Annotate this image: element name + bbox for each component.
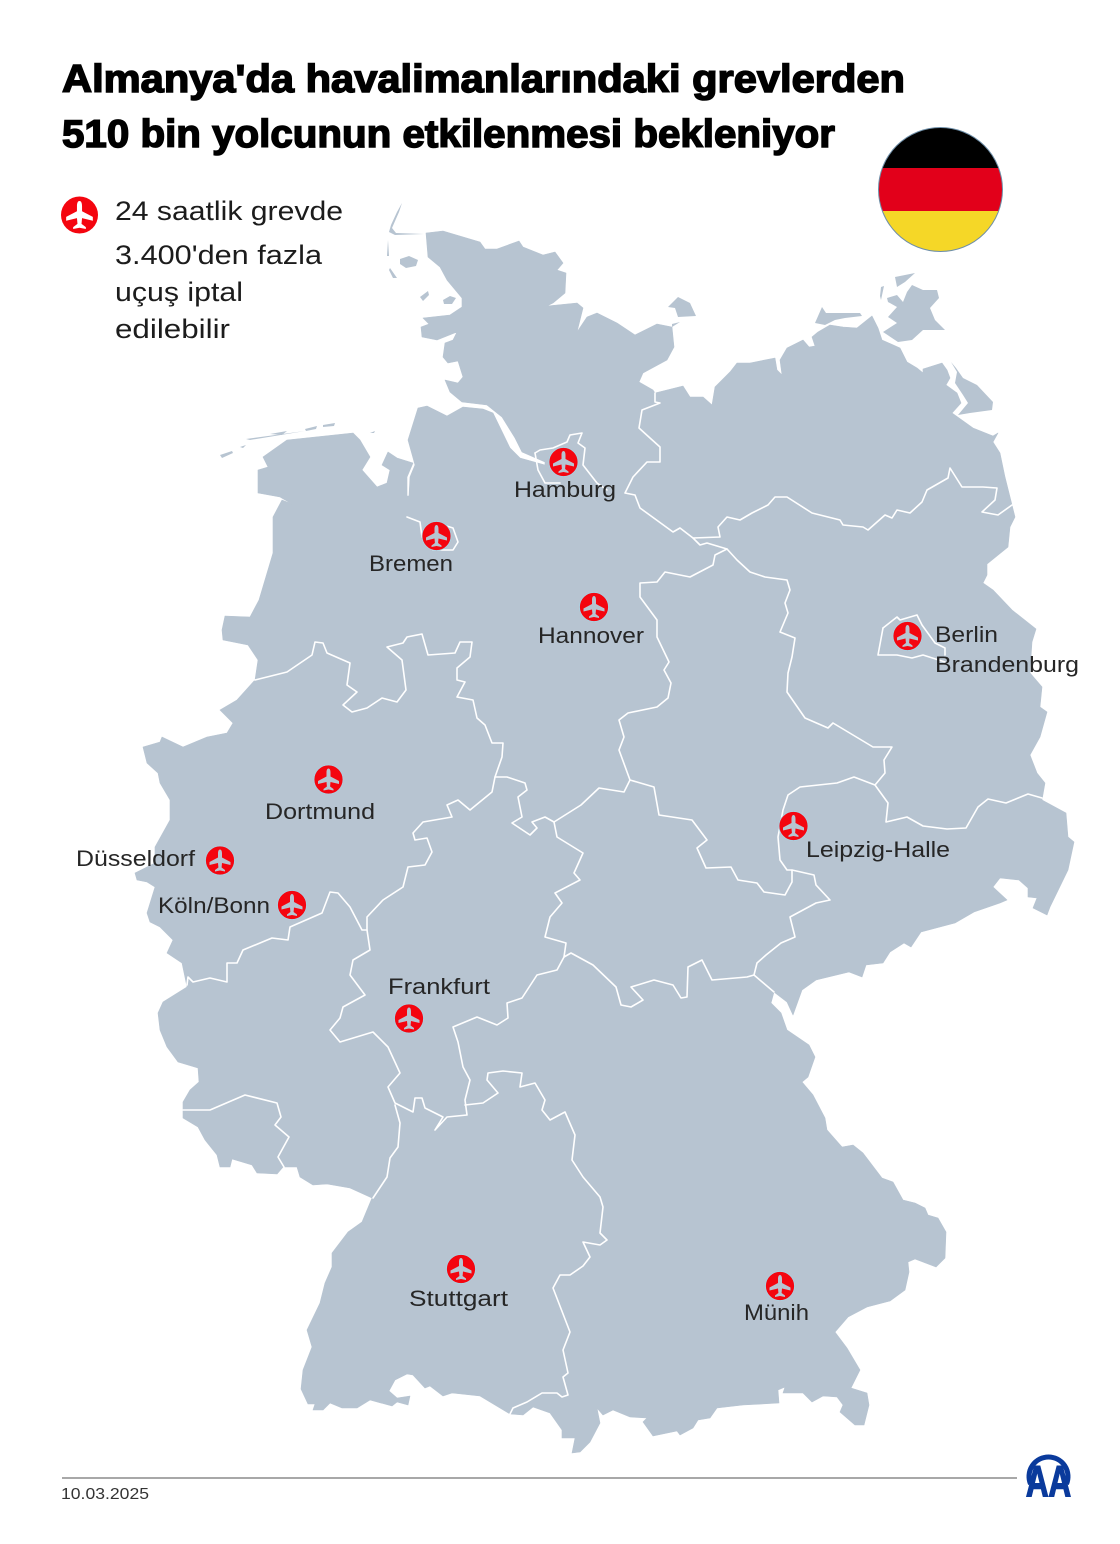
airport: Dortmund: Dortmund (265, 799, 375, 824)
date: 10.03.2025 (61, 1486, 149, 1503)
airport: Frankfurt: Frankfurt (388, 974, 490, 999)
airport: Hamburg: Hamburg (514, 477, 616, 502)
footer rule (62, 1477, 1017, 1479)
legend text: uçuş iptal (115, 277, 243, 307)
airport: Stuttgart: Stuttgart (409, 1286, 508, 1311)
airport: Stuttgart (409, 1254, 508, 1311)
legend text: 3.400'den fazla (115, 240, 323, 270)
airport: Köln/Bonn (158, 890, 306, 920)
airport: Berlin Brandenburg: Berlin (935, 622, 998, 647)
airport: Münih: Münih (744, 1300, 809, 1325)
legend icon: plane (61, 196, 98, 234)
airport: Hannover (538, 592, 644, 648)
islands (220, 203, 993, 458)
airport: Bremen: Bremen (369, 551, 453, 576)
title: Almanya'da havalimanlarındaki grevlerden (62, 58, 905, 101)
airport: Köln/Bonn: Köln/Bonn (158, 893, 270, 918)
airport: Hamburg (514, 448, 616, 502)
airport: Leipzig-Halle: Leipzig-Halle (806, 837, 950, 862)
airport: Dortmund (265, 765, 375, 824)
title (62, 58, 905, 156)
legend text: edilebilir (115, 314, 230, 344)
airport: Berlin Brandenburg (893, 622, 1079, 677)
airport: Leipzig-Halle (779, 812, 950, 862)
title: 510 bin yolcunun etkilenmesi bekleniyor (62, 113, 835, 156)
mainland outline (135, 231, 1074, 1453)
region borders (183, 393, 1042, 1414)
airport: Berlin Brandenburg: Brandenburg (935, 652, 1079, 677)
airport: Düsseldorf: Düsseldorf (76, 846, 196, 871)
map of Germany (135, 203, 1074, 1453)
airport: Bremen (369, 522, 453, 576)
airport: Münih (744, 1272, 809, 1325)
legend text: 24 saatlik grevde (115, 196, 343, 226)
flag of Germany (878, 127, 1003, 252)
airport: Hannover: Hannover (538, 623, 644, 648)
AA logo: AA (1026, 1457, 1071, 1506)
airport: Düsseldorf (76, 846, 234, 875)
legend text (115, 196, 343, 344)
airport: Frankfurt (388, 974, 490, 1033)
